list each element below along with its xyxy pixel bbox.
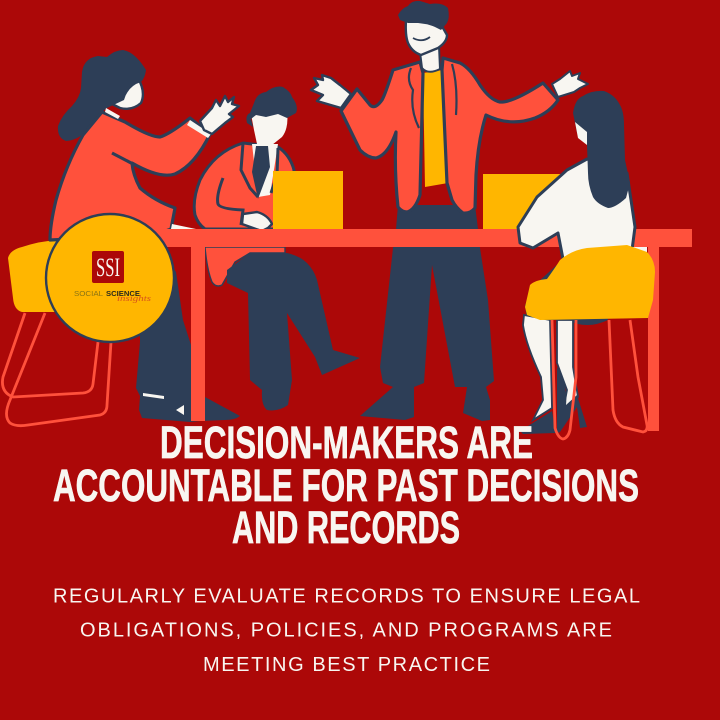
far leg (557, 320, 578, 412)
hair (58, 50, 146, 141)
logo wordmark: SOCIAL (74, 289, 103, 298)
table leg right (648, 247, 659, 431)
logo script: insights (117, 294, 151, 303)
shirt and tie (252, 144, 278, 197)
jacket (194, 143, 294, 229)
neck (420, 46, 440, 72)
seated man with tie (194, 87, 360, 410)
face (112, 78, 143, 109)
hand (242, 212, 272, 231)
skirt and lap (525, 262, 608, 325)
right hand (552, 71, 588, 97)
body text: OBLIGATIONS, POLICIES, AND PROGRAMS ARE (80, 620, 612, 642)
hair (246, 87, 297, 127)
seated woman, left (50, 50, 240, 422)
seated woman, right (518, 91, 655, 439)
body text: MEETING BEST PRACTICE (203, 654, 490, 676)
laptops (273, 171, 561, 231)
table leg left (191, 247, 205, 421)
shoes (557, 367, 587, 433)
yellow chair seat (525, 245, 655, 320)
body text: REGULARLY EVALUATE RECORDS TO ENSURE LEGAL (53, 586, 640, 608)
hand (200, 96, 239, 134)
white blouse (518, 159, 635, 259)
jacket right panel (442, 58, 558, 213)
table top (150, 229, 692, 247)
heading: DECISION-MAKERS ARE (160, 417, 533, 468)
hair (398, 1, 449, 30)
face (406, 20, 447, 55)
lower jacket (205, 247, 285, 286)
heading (53, 417, 639, 553)
left hand (311, 75, 351, 108)
logo square (92, 251, 124, 283)
chair frame (552, 320, 576, 439)
trousers and boots (136, 235, 240, 422)
trousers and shoes (360, 205, 494, 421)
logo wordmark bold: SCIENCE (106, 289, 140, 298)
jacket (50, 112, 210, 240)
jacket left panel (341, 62, 423, 212)
face (575, 122, 587, 145)
near leg (523, 315, 552, 420)
logo badge (46, 214, 174, 342)
logo letters: SSI (96, 253, 120, 282)
heading: AND RECORDS (232, 502, 460, 553)
trousers and shoes (227, 253, 360, 410)
left chair (2, 240, 111, 426)
body text (53, 586, 640, 676)
yellow shirt (423, 70, 448, 187)
face (251, 112, 287, 145)
hair (573, 91, 630, 208)
standing man (311, 1, 588, 421)
